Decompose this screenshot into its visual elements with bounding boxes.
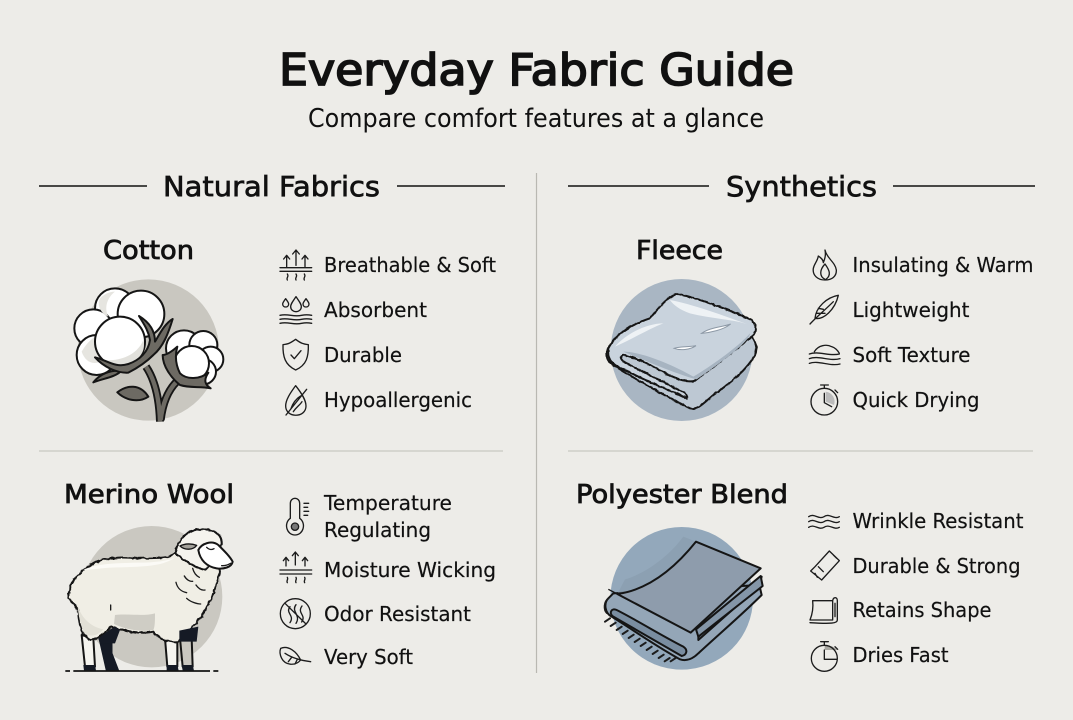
subtitle: Compare comfort features at a glance (308, 104, 764, 134)
feature: moisture wicking: Moisture Wicking (324, 558, 496, 582)
feature: insulating and warm: Insulating & Warm (852, 253, 1034, 277)
illustration: folded fleece blanket (606, 279, 756, 421)
feature: lightweight: Lightweight (852, 298, 970, 322)
feature: dries fast (811, 642, 949, 671)
feature: temperature regulating: Temperature (323, 491, 452, 515)
feature: absorbent (280, 297, 427, 324)
feature: temperature regulating: Regulating (324, 518, 431, 542)
illustration: folded polyester fabric (604, 527, 763, 670)
feature: durable and strong (811, 551, 1020, 580)
feature: temperature regulating (287, 491, 452, 542)
title: Everyday Fabric Guide (279, 45, 794, 96)
section heading: synthetics: Synthetics (726, 170, 877, 203)
feature: lightweight (810, 295, 970, 324)
feature: insulating and warm (813, 250, 1034, 280)
feature: durable (283, 339, 402, 370)
heading: fleece: Fleece (636, 236, 723, 266)
column divider (536, 173, 538, 673)
heading: polyester blend: Polyester Blend (576, 480, 788, 510)
feature: durable: Durable (324, 343, 402, 367)
feature: breathable and soft: Breathable & Soft (324, 253, 496, 277)
section heading: natural fabrics: Natural Fabrics (163, 170, 380, 203)
feature: very soft: Very Soft (324, 645, 413, 669)
illustration: cotton plant (74, 279, 223, 422)
feature: quick drying: Quick Drying (852, 388, 980, 412)
panel: polyester blend (576, 480, 1024, 671)
heading: cotton: Cotton (103, 236, 194, 266)
feature: hypoallergenic (286, 386, 472, 415)
panel: fleece (606, 236, 1034, 421)
feature: hypoallergenic: Hypoallergenic (324, 388, 472, 412)
feature: durable and strong: Durable & Strong (852, 554, 1020, 578)
feature: moisture wicking (280, 552, 496, 583)
feature: soft texture: Soft Texture (852, 343, 970, 367)
feature: absorbent: Absorbent (324, 298, 427, 322)
feature: very soft (280, 645, 413, 669)
feature: quick drying (811, 385, 980, 415)
panel: merino wool (64, 480, 496, 671)
feature: wrinkle resistant: Wrinkle Resistant (852, 509, 1024, 533)
panel: cotton (74, 236, 496, 422)
illustration: sheep (65, 526, 233, 671)
feature: breathable and soft (280, 250, 496, 280)
heading: merino wool: Merino Wool (64, 480, 234, 510)
feature: dries fast: Dries Fast (852, 643, 949, 667)
feature: odor resistant (280, 599, 471, 629)
feature: odor resistant: Odor Resistant (324, 602, 471, 626)
feature: retains shape: Retains Shape (852, 598, 992, 622)
